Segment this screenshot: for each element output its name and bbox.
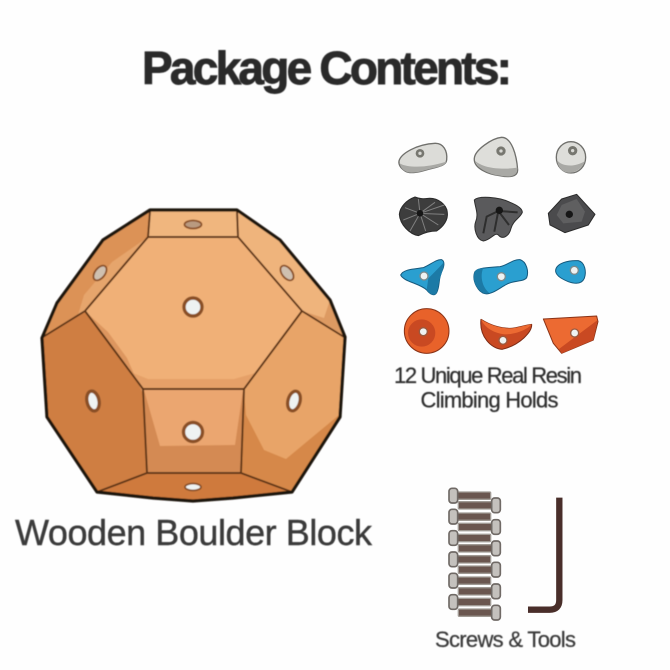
hold: blue tripod (401, 260, 444, 295)
screws and allen key (449, 488, 559, 620)
face: upper right (237, 211, 344, 337)
hold: grey 3 (556, 142, 586, 173)
face: left (42, 311, 147, 492)
hold: grey 2 (474, 137, 518, 177)
hold: orange wedge (543, 316, 598, 353)
edges (43, 211, 344, 492)
hold: orange crescent (481, 319, 532, 349)
hold: blue oval (556, 261, 585, 283)
outline (42, 210, 345, 501)
face: top strip (148, 211, 238, 237)
block body (42, 210, 345, 501)
screws (449, 488, 500, 620)
hold: black faceted (548, 194, 595, 233)
face: right (241, 311, 344, 492)
hold: orange round (404, 309, 449, 353)
allen key (528, 498, 559, 610)
label: screws and tools: Screws & Tools (435, 627, 576, 652)
climbing holds: blue and orange rows (401, 260, 598, 353)
face: front (143, 389, 244, 473)
hold: blue bowtie (474, 260, 528, 294)
title: Package Contents: (142, 42, 512, 94)
climbing holds: grey and black rows (399, 137, 595, 241)
screw holes (85, 220, 302, 490)
hold: grey 1 (399, 143, 447, 173)
face: bottom strip (97, 473, 292, 501)
label: wooden boulder block: Wooden Boulder Block (15, 512, 373, 553)
label: climbing holds: 12 Unique Real Resin (394, 363, 582, 388)
face: main hexagon (85, 237, 302, 389)
label: climbing holds (394, 363, 582, 412)
face: upper left (43, 211, 150, 337)
hold: black fluted (399, 197, 447, 236)
hold: black ridged (474, 197, 522, 241)
label: climbing holds: Climbing Holds (420, 388, 558, 412)
wooden boulder block illustration (42, 210, 345, 501)
